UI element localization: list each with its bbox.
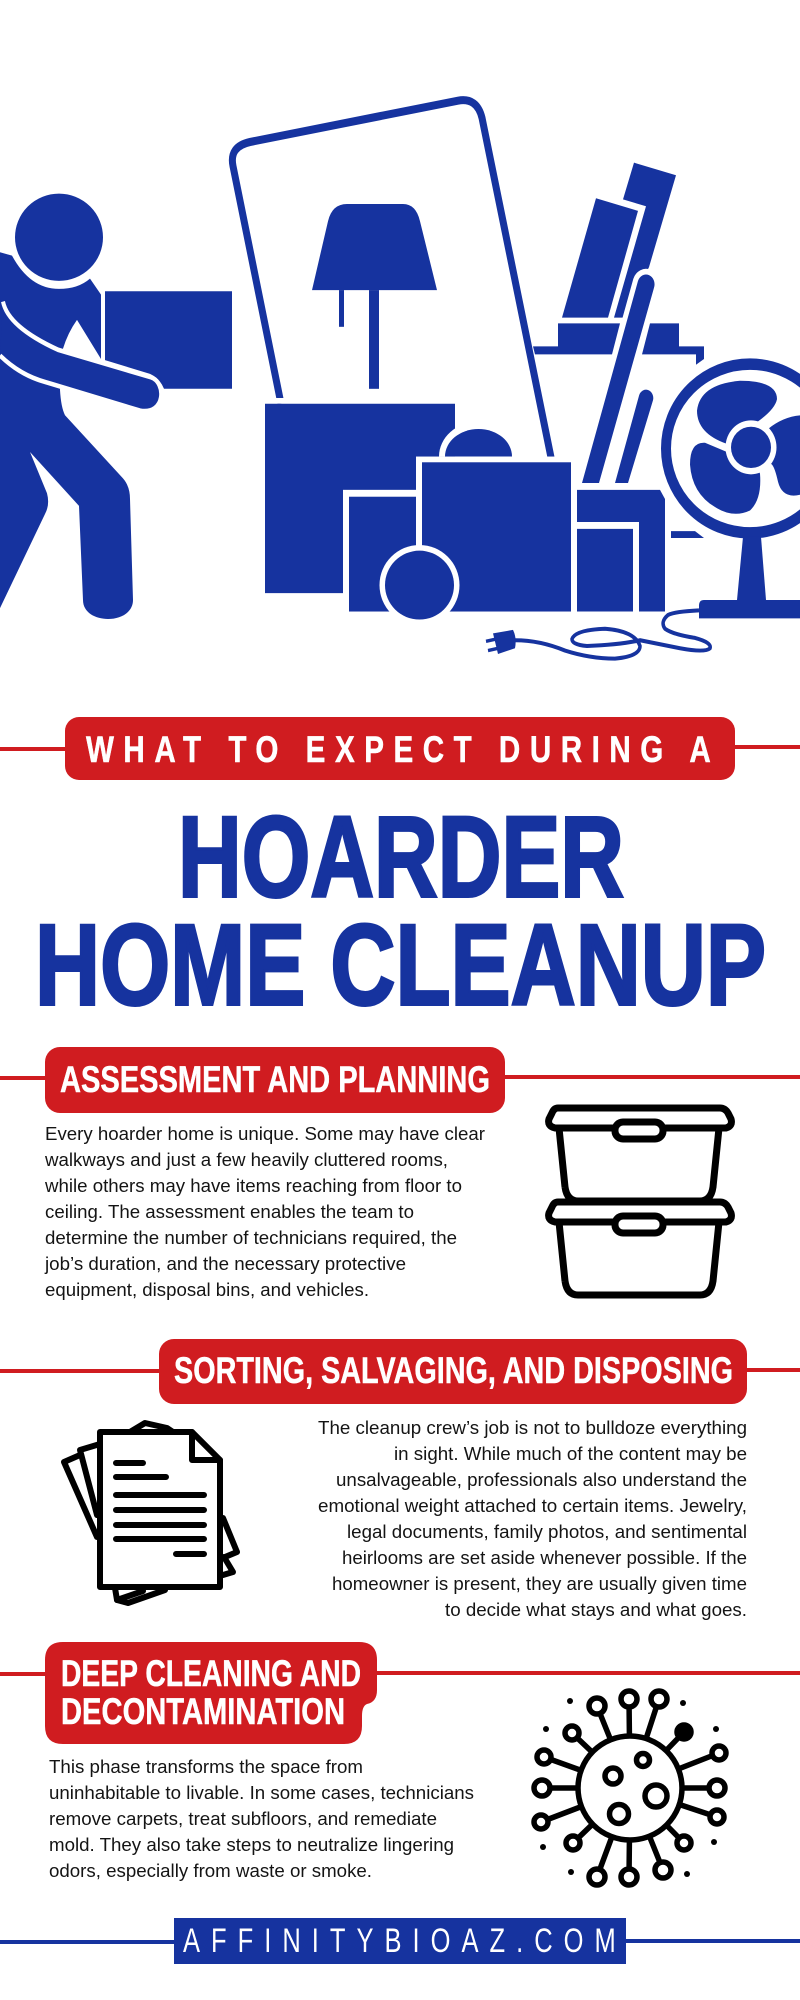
text block: deep cleaning: uninhabitable to livable. In some cases, technicians [49, 1782, 474, 1803]
lamp [312, 204, 437, 389]
power cord and plug [486, 610, 710, 659]
text block: sorting: in sight. While much of the content may be [394, 1443, 747, 1464]
text block: sorting: unsalvageable, professionals also understand the [336, 1469, 747, 1490]
main title [35, 794, 766, 1030]
heading banner: what to expect [0, 717, 800, 780]
text block: assessment: job’s duration, and the necessary protective [44, 1253, 406, 1274]
fan [666, 364, 800, 618]
heading: sorting, salvaging, and disposing [0, 1339, 800, 1404]
footer: website banner: AFFINITYBIOAZ.COM [183, 1923, 616, 1960]
text block: sorting: The cleanup crew’s job is not to bulldoze everything [318, 1417, 747, 1438]
text block: assessment: equipment, disposal bins, and vehicles. [45, 1279, 369, 1300]
text block: deep cleaning: remove carpets, treat subfloors, and remediate [49, 1808, 437, 1829]
panel: assessment and planning [0, 1047, 800, 1300]
main title: HOARDER [178, 794, 624, 922]
footer: website banner [0, 1918, 800, 1964]
cabinet [265, 404, 455, 612]
heading: assessment and planning: ASSESSMENT AND PLANNING [60, 1059, 490, 1100]
text block: deep cleaning [49, 1756, 474, 1881]
text block: deep cleaning: This phase transforms the space from [49, 1756, 363, 1777]
text block: assessment: while others may have items reaching from floor to [44, 1175, 462, 1196]
icon: virus particle [534, 1691, 726, 1885]
heading: assessment and planning [0, 1047, 800, 1113]
text block: deep cleaning: mold. They also take steps to neutralize lingering [49, 1834, 454, 1855]
panel: sorting, salvaging, and disposing [0, 1339, 800, 1620]
panel: deep cleaning and decontamination [0, 1642, 800, 1885]
text block: assessment [44, 1123, 485, 1300]
heading: deep cleaning and decontamination: DEEP CLEANING AND [61, 1653, 361, 1694]
mirror frame [232, 100, 552, 462]
text block: sorting: heirlooms are set aside whenever possible. If the [342, 1547, 747, 1568]
text block: sorting [318, 1417, 747, 1620]
text block: deep cleaning: odors, especially from waste or smoke. [49, 1860, 372, 1881]
stacked boxes [343, 457, 665, 616]
long rods [582, 275, 655, 483]
text block: sorting: to decide what stays and what goes. [445, 1599, 747, 1620]
round ball [380, 545, 460, 625]
text block: assessment: Every hoarder home is unique. Some may have clear [45, 1123, 485, 1144]
person carrying a box [0, 191, 232, 619]
icon: stacked storage containers [549, 1108, 731, 1295]
icon: stack of documents [64, 1423, 237, 1603]
shelf with books [533, 163, 704, 365]
heading banner: what to expect: WHAT TO EXPECT DURING A [86, 730, 711, 771]
text block: sorting: emotional weight attached to certain items. Jewelry, [318, 1495, 747, 1516]
heading: deep cleaning and decontamination [0, 1642, 800, 1744]
text block: sorting: homeowner is present, they are usually given time [332, 1573, 747, 1594]
heading: deep cleaning and decontamination: DECONTAMINATION [61, 1691, 345, 1732]
text block: assessment: walkways and just a few heavily cluttered rooms, [44, 1149, 448, 1170]
text block: assessment: determine the number of technicians required, the [45, 1227, 457, 1248]
text block: sorting: legal documents, family photos, and sentimental [347, 1521, 747, 1542]
hero illustration: person moving hoarded items [0, 100, 800, 659]
dome object [439, 422, 518, 457]
text block: assessment: ceiling. The assessment enables the team to [45, 1201, 414, 1222]
